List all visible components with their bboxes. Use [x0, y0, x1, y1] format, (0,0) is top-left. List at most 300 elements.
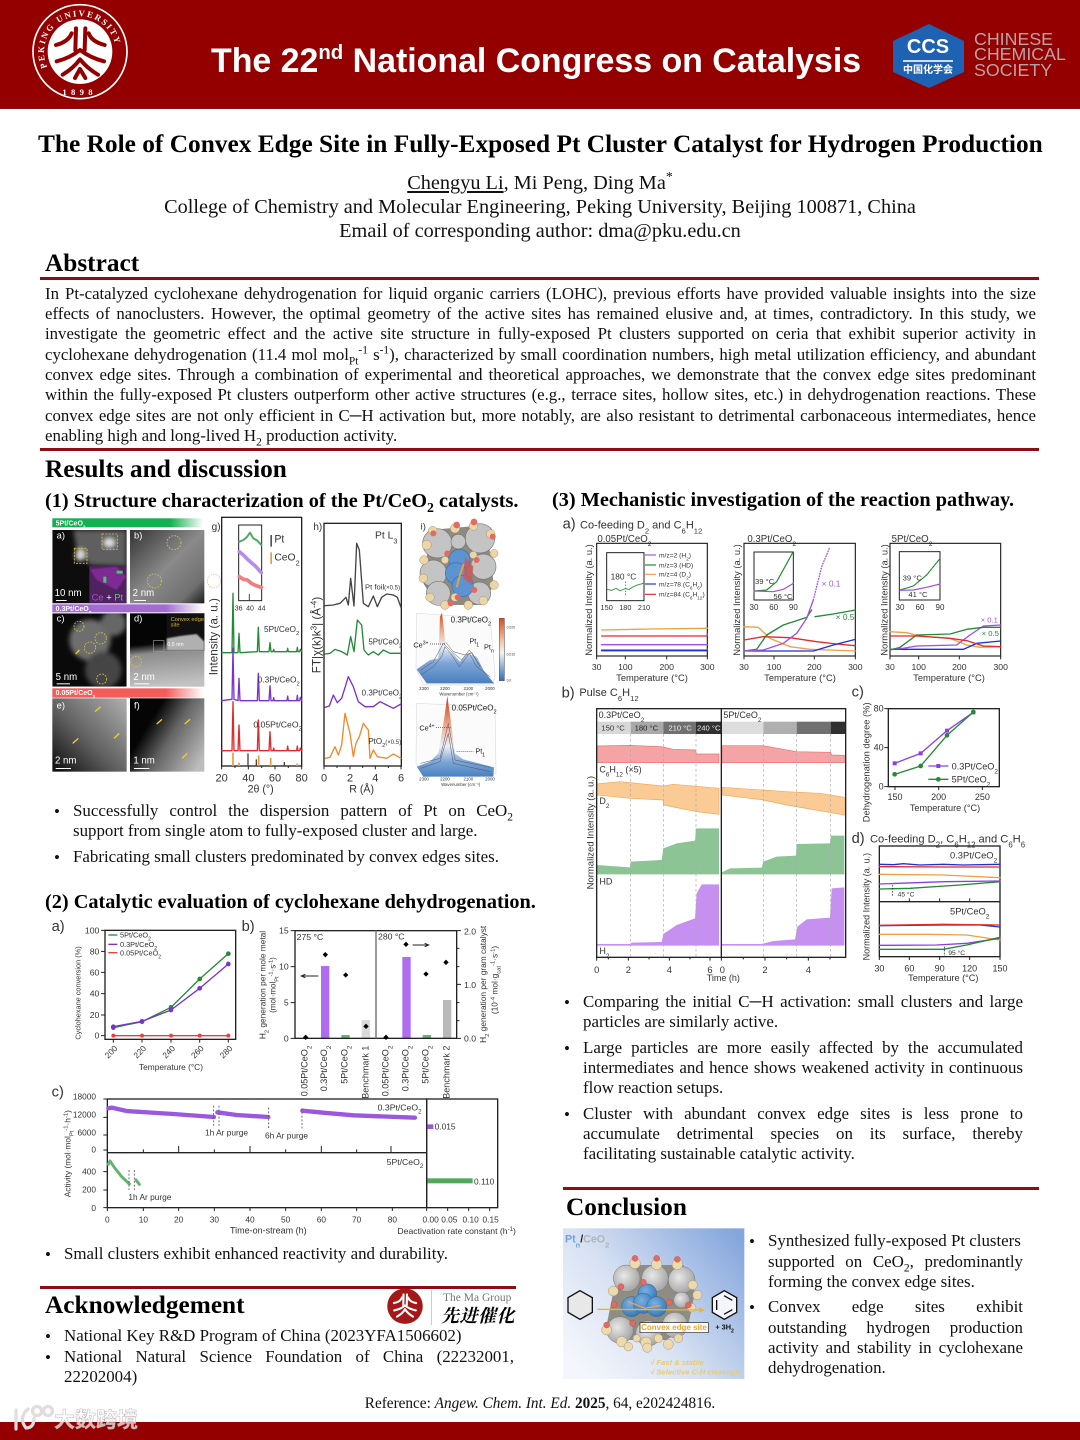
- inset: [896, 552, 945, 612]
- panel: 5Pt/CeO2: 300: [993, 662, 1008, 672]
- panel: 0.05Pt/CeO2: Normalized Intensity (a. u.): [584, 544, 594, 656]
- section 2 bullet: Small clusters exhibit enhanced reactivity and durability.: [64, 1244, 448, 1263]
- authors and affiliation: Chengyu Li, Mi Peng, Ding Ma*: [407, 169, 673, 194]
- chart b: hydrogen generation: 15: [279, 926, 289, 936]
- legend: 0.3Pt/CeO2: [952, 761, 998, 775]
- 3D spectrum j: 0.3Pt/CeO2: Wavenumber (cm⁻¹): [439, 691, 479, 696]
- panel: 0.3Pt/CeO2: 30: [739, 662, 749, 672]
- abstract text: effects of nanoclusters. However, the optimal geometry of the active sites has remained elusive and, at times, contradictory. In this study, we: [45, 304, 1036, 323]
- chart g: XRD patterns: 2θ (°): [248, 783, 274, 795]
- 3D spectrum j: 0.05Pt/CeO2: 2100: [464, 777, 474, 782]
- micrograph a: 10 nm: [55, 588, 82, 599]
- chart h: EXAFS spectra: R (Å): [349, 782, 374, 795]
- chart d: co-feeding with benzene: 120: [962, 963, 977, 973]
- chart g: XRD patterns: 40: [242, 773, 254, 785]
- 3D spectrum j: 0.3Pt/CeO2: 2100: [464, 686, 474, 691]
- chart b: hydrogen generation: 10: [279, 962, 289, 972]
- XRD inset: 44: [258, 606, 266, 613]
- watermark text: 大数跨境: [54, 1404, 138, 1434]
- heading: section 2: (2) Catalytic evaluation of cyclohexane dehydrogenation.: [45, 891, 536, 913]
- section 3 bullets: intermediates and hence shows weakened activity in continuous: [583, 1058, 1023, 1077]
- panel: 5Pt/CeO2: 5Pt/CeO2: [892, 534, 933, 548]
- chart c: stability over time: 18000: [73, 1091, 96, 1101]
- micrograph d: 2 nm: [133, 672, 155, 683]
- chart g: XRD patterns: 5Pt/CeO2: [264, 624, 299, 637]
- 3D spectrum j: 0.3Pt/CeO2: 2200: [440, 686, 450, 691]
- society name: SOCIETY: [974, 60, 1052, 80]
- inset: 90: [789, 603, 798, 612]
- chart a: conversion vs temperature: 20: [90, 1010, 100, 1020]
- chart c: dehydrogenation degree: 0: [879, 782, 884, 792]
- authors and affiliation: Email of corresponding author: dma@pku.edu.cn: [339, 220, 741, 242]
- group name: The Ma Group: [443, 1292, 511, 1304]
- chart b: pulse C6H12: 240 °C: [697, 724, 721, 733]
- chart d: co-feeding with benzene: 95 °C: [948, 949, 965, 957]
- 3D spectrum j: 0.05Pt/CeO2: 2200: [440, 777, 450, 782]
- chart c: stability over time: 0.00: [423, 1214, 439, 1224]
- chart c: dehydrogenation degree: 250: [975, 792, 990, 802]
- chart h: EXAFS spectra: 0: [321, 773, 327, 785]
- section 1 bullets: support from single atom to fully-exposed cluster and large.: [73, 821, 478, 840]
- panel: 0.3Pt/CeO2: Temperature (°C): [764, 673, 836, 683]
- benzene icon: [712, 1291, 737, 1319]
- chart b: pulse C6H12: b): [562, 685, 575, 701]
- chart c: dehydrogenation degree: 200: [931, 792, 946, 802]
- color scale bar: 0.020: [507, 625, 515, 629]
- inset: 30: [896, 603, 905, 612]
- chart c: stability over time: 70: [352, 1214, 362, 1224]
- chart c: stability over time: c): [52, 1085, 64, 1101]
- chart g: XRD patterns: 0.05Pt/CeO2: [253, 719, 303, 732]
- label bar: 5Pt/CeO2: 5Pt/CeO2: [56, 520, 86, 530]
- heading: Abstract: Abstract: [45, 249, 139, 277]
- chart c: dehydrogenation degree: 80: [874, 704, 884, 714]
- chart c: stability over time: 0.3Pt/CeO2: [378, 1102, 422, 1115]
- XRD legend: Pt: [274, 534, 284, 546]
- panel: 0.05Pt/CeO2: 30: [592, 662, 602, 672]
- chart b: hydrogen generation: H2 generation per gram catalyst: [478, 925, 491, 1043]
- support label: Ptn/CeO2: [565, 1233, 609, 1249]
- panel: 5Pt/CeO2: 200: [952, 662, 967, 672]
- chart b: hydrogen generation: 0.3Pt/CeO2: [319, 1045, 332, 1091]
- panel: 5Pt/CeO2: 100: [911, 662, 926, 672]
- legend: m/z=2 (H2): [659, 552, 691, 561]
- conclusion bullets: forming the convex edge sites.: [768, 1272, 975, 1291]
- watermark: [14, 1404, 138, 1434]
- panel: 0.05Pt/CeO2: [584, 534, 715, 683]
- chart b: hydrogen generation: 1.0: [464, 980, 476, 990]
- figure: co-feeding D2 and C6H12: Co-feeding D2 and C6H12: [580, 519, 702, 535]
- legend: [645, 552, 705, 600]
- chart c: stability over time: 0.10: [463, 1214, 479, 1224]
- chart b: pulse C6H12: D2: [599, 796, 610, 810]
- calligraphy: 先进催化: [441, 1302, 515, 1328]
- logo: red seal: [387, 1288, 423, 1324]
- chart b: hydrogen generation: (10-4 mol·gcat-1·s-1): [489, 946, 502, 1014]
- structure model i: i): [421, 521, 426, 531]
- chart d: co-feeding with benzene: 60: [904, 963, 914, 973]
- chart h: EXAFS spectra: 6: [398, 773, 404, 785]
- chart d: co-feeding with benzene: [852, 831, 1025, 983]
- inset: 180 °C: [611, 571, 636, 581]
- chart d: co-feeding with benzene: 90: [935, 963, 945, 973]
- inset: 210: [638, 603, 650, 612]
- acknowledgement list: National Natural Science Foundation of China (22232001,: [64, 1347, 514, 1366]
- logo: CCS hexagon: [893, 24, 964, 88]
- chart a: conversion vs temperature: 260: [189, 1043, 206, 1060]
- 3D spectrum j: 0.3Pt/CeO2: [413, 613, 495, 696]
- chart b: hydrogen generation: 280 °C: [378, 932, 405, 942]
- chart b: hydrogen generation: b): [242, 919, 255, 935]
- chart b: pulse C6H12: 4: [806, 965, 811, 975]
- section 3 bullets: flow reaction setups.: [583, 1078, 723, 1097]
- label bar: 0.3Pt/CeO2: 0.3Pt/CeO2: [56, 606, 92, 616]
- inset: 41 °C: [908, 590, 928, 599]
- chart c: dehydrogenation degree: 150: [887, 792, 903, 802]
- legend: m/z=4 (D2): [659, 572, 691, 580]
- micrograph b: 2 nm: [133, 588, 154, 599]
- chart b: pulse C6H12: 6: [707, 965, 713, 975]
- chart c: stability over time: 1h Ar purge: [128, 1192, 172, 1202]
- chart c: stability over time: Deactivation rate constant (h-1): [397, 1226, 516, 1236]
- conference title: The 22nd National Congress on Catalysis: [211, 42, 861, 80]
- figure: convex edge site graphic: [563, 1228, 744, 1379]
- society name: CHEMICAL: [974, 44, 1066, 64]
- 3D spectrum j: 0.05Pt/CeO2: Wavenumber (cm⁻¹): [441, 782, 481, 787]
- authors and affiliation: [164, 169, 916, 242]
- chart b: pulse C6H12: HD: [599, 876, 613, 886]
- legend: m/z=78 (C6H6): [659, 581, 702, 590]
- chart a: conversion vs temperature: [52, 919, 236, 1072]
- chart c: stability over time: 5Pt/CeO2: [387, 1157, 424, 1170]
- micrograph b: [130, 530, 204, 603]
- chart b: pulse C6H12: 4: [667, 965, 672, 975]
- text: •: [54, 848, 60, 867]
- panel: 0.3Pt/CeO2: [732, 534, 863, 683]
- XRD inset: [235, 525, 266, 613]
- section 1 bullets: Fabricating small clusters predominated by convex edges sites.: [73, 847, 499, 866]
- section 1 bullets: Successfully control the dispersion pattern of Pt on CeO2: [73, 801, 513, 823]
- panel: 0.3Pt/CeO2: 200: [807, 662, 822, 672]
- heading: Results and discussion: Results and discussion: [45, 455, 287, 483]
- text: •: [749, 1232, 755, 1251]
- 3D spectrum j: 0.05Pt/CeO2: 0.05Pt/CeO2: [452, 704, 497, 716]
- acknowledgement list: National Key R&D Program of China (2023YFA1506602): [64, 1326, 462, 1345]
- 3D spectrum j: 0.3Pt/CeO2: Ptn: [484, 642, 494, 654]
- micrograph d: 0.5 nm: [167, 642, 184, 648]
- society name: [974, 29, 1066, 80]
- section 3 bullets: [564, 992, 1023, 1163]
- callout: convex edge site: Convex edge site: [641, 1323, 707, 1332]
- inset: 39 °C: [755, 577, 775, 586]
- panel: 5Pt/CeO2: 30: [885, 662, 895, 672]
- divider: [431, 1290, 432, 1325]
- chart b: hydrogen generation: Benchmark 1: [360, 1046, 370, 1099]
- chart a: conversion vs temperature: Temperature (°C): [139, 1062, 203, 1072]
- panel: 5Pt/CeO2: [879, 534, 1008, 683]
- panel: 0.3Pt/CeO2: × 0.1: [822, 579, 841, 589]
- conclusion bullets: [749, 1231, 1023, 1377]
- legend: 0.3Pt/CeO2: [120, 940, 157, 952]
- chart h: EXAFS spectra: FT|χ(k)k3| (Å-4): [309, 597, 324, 673]
- panel: 0.3Pt/CeO2: 300: [848, 662, 863, 672]
- chart b: pulse C6H12: 210 °C: [668, 724, 692, 733]
- chart d: co-feeding with benzene: 150: [992, 963, 1008, 973]
- panel: 0.05Pt/CeO2: 0.05Pt/CeO2: [597, 534, 652, 548]
- inset: [750, 552, 798, 612]
- conclusion bullets: Synthesized fully-exposed Pt clusters: [768, 1231, 1021, 1250]
- chart c: dehydrogenation degree: Dehydrogenation degree (%): [861, 702, 871, 822]
- legend: 5Pt/CeO2: [120, 931, 151, 943]
- chart a: conversion vs temperature: 280: [218, 1043, 235, 1060]
- micrograph f: f): [134, 700, 140, 710]
- chart a: conversion vs temperature: 100: [85, 925, 100, 935]
- chart b: pulse C6H12: 0: [720, 965, 725, 975]
- structure model i: [419, 519, 498, 609]
- chart b: hydrogen generation: 0.3Pt/CeO2: [401, 1045, 414, 1091]
- chart d: co-feeding with benzene: 45 °C: [898, 891, 915, 899]
- text: •: [45, 1327, 51, 1346]
- micrograph a: a): [57, 530, 65, 540]
- inset: [601, 553, 650, 612]
- chart b: hydrogen generation: Benchmark 2: [441, 1046, 451, 1099]
- panel: 0.3Pt/CeO2: 100: [767, 662, 781, 672]
- chart b: pulse C6H12: 5Pt/CeO2: [723, 710, 762, 724]
- inset: 60: [916, 603, 925, 612]
- chart b: hydrogen generation: [242, 919, 502, 1099]
- chart b: hydrogen generation: (mol·molPt-1·s-1): [269, 957, 281, 1013]
- chart a: conversion vs temperature: 0: [95, 1031, 100, 1041]
- XRD inset: 36: [235, 606, 243, 613]
- benefits: √ Selective C-H cleavage: [650, 1367, 740, 1376]
- chart c: stability over time: 40: [245, 1214, 255, 1224]
- text: •: [564, 1039, 570, 1058]
- abstract text: [45, 284, 1036, 448]
- chart h: EXAFS spectra: PtO2(×0.5): [368, 737, 401, 749]
- chart h: EXAFS spectra: 2: [347, 773, 353, 785]
- chart g: XRD patterns: 20: [216, 773, 228, 785]
- chart c: stability over time: 80: [388, 1214, 397, 1224]
- micrograph a: Ce + Pt: [92, 593, 123, 603]
- chart c: stability over time: 20: [174, 1214, 184, 1224]
- panel: 5Pt/CeO2: Temperature (°C): [913, 673, 985, 683]
- micrograph c: c): [57, 614, 64, 624]
- chart b: pulse C6H12: 2: [762, 965, 768, 975]
- legend: m/z=3 (HD): [659, 562, 693, 569]
- conclusion bullets: outstanding hydrogen production: [768, 1318, 1023, 1337]
- section 3 bullets: facilitating sustainable catalytic activity.: [583, 1144, 855, 1163]
- chart c: stability over time: 0: [91, 1145, 96, 1155]
- color scale bar: 0.010: [507, 652, 515, 656]
- chart c: dehydrogenation degree: 40: [874, 743, 884, 753]
- chart c: stability over time: 12000: [73, 1110, 96, 1120]
- panel: 0.05Pt/CeO2: 300: [700, 662, 715, 672]
- micrograph e: e): [57, 700, 65, 710]
- chart c: stability over time: 30: [210, 1214, 219, 1224]
- section 3 bullets: particles are similarly active.: [583, 1012, 778, 1031]
- header band: [0, 0, 1080, 109]
- chart c: stability over time: 0.15: [483, 1214, 499, 1224]
- heading: section 3: (3) Mechanistic investigation of the reaction pathway.: [552, 489, 1014, 511]
- chart c: stability over time: 0.05: [441, 1214, 458, 1224]
- panel: 0.05Pt/CeO2: 200: [659, 662, 674, 672]
- panel: 0.3Pt/CeO2: × 0.5: [836, 612, 855, 622]
- poster title: The Role of Convex Edge Site in Fully-Exposed Pt Cluster Catalyst for Hydrogen Production: [38, 130, 1043, 158]
- 3D spectrum j: 0.05Pt/CeO2: Pt1: [475, 746, 485, 758]
- chart b: pulse C6H12: Pulse C6H12: [579, 687, 639, 702]
- chart c: stability over time: 200: [82, 1185, 96, 1195]
- chart b: pulse C6H12: 150 °C: [601, 724, 625, 733]
- chart c: stability over time: 6000: [77, 1127, 96, 1137]
- abstract text: In Pt-catalyzed cyclohexane dehydrogenation for liquid organic carriers (LOHC), previous efforts have provided valuable insights into the size: [45, 284, 1036, 303]
- chart b: hydrogen generation: 2.0: [464, 926, 476, 936]
- logo: Peking University seal: 1898: [62, 87, 97, 97]
- chart b: pulse C6H12: Normalized Intensity (a. u.): [585, 776, 596, 889]
- legend: [928, 761, 998, 788]
- micrograph d: site: [171, 623, 179, 629]
- chart a: conversion vs temperature: Cyclohexane conversion (%): [74, 946, 83, 1040]
- chart g: XRD patterns: 0.3Pt/CeO2: [258, 674, 300, 687]
- logo: CCS hexagon: CCS: [907, 36, 949, 58]
- acknowledgement list: 22202004): [64, 1367, 137, 1386]
- figure: structure characterization: [52, 516, 515, 795]
- figure: co-feeding D2 and C6H12: [563, 516, 1008, 683]
- chart d: co-feeding with benzene: Normalized Intensity (a. u.): [861, 853, 871, 960]
- reference line: Reference: Angew. Chem. Int. Ed. 2025, 64, e202424816.: [365, 1395, 715, 1412]
- group logo and signature: [387, 1288, 516, 1328]
- 3D spectrum j: 0.3Pt/CeO2: Pt1: [469, 636, 479, 648]
- micrograph b: b): [134, 530, 142, 540]
- chart g: XRD patterns: Intensity (a. u.): [207, 598, 220, 675]
- chart h: EXAFS spectra: 4: [372, 773, 378, 785]
- acknowledgement list: [45, 1326, 514, 1386]
- chart a: conversion vs temperature: 200: [103, 1043, 120, 1060]
- chart b: hydrogen generation: 5Pt/CeO2: [339, 1045, 353, 1084]
- chart g: XRD patterns: g): [212, 522, 221, 533]
- chart g: XRD patterns: [207, 517, 308, 795]
- abstract text: convex edge sites. Through a combination of experimental and theoretical approaches, we demonstrate that the convex edge sites predominant: [45, 365, 1036, 384]
- society name: CHINESE: [974, 29, 1053, 49]
- inset: 90: [936, 603, 945, 612]
- footer band: [0, 1422, 1080, 1440]
- text: •: [45, 1348, 51, 1367]
- benefits: [650, 1358, 740, 1376]
- chart g: XRD patterns: 80: [296, 773, 308, 785]
- chart a: conversion vs temperature: 80: [90, 946, 100, 956]
- abstract text: convex edge sites are not only efficient in C─H activation but, more notably, are also resistant to detrimental carbonaceous intermediates, hence: [45, 406, 1036, 425]
- micrograph c: 5 nm: [56, 672, 77, 683]
- chart b: hydrogen generation: 5: [284, 998, 289, 1008]
- label bar: 5Pt/CeO2: [52, 518, 203, 530]
- 3D spectrum j: 0.05Pt/CeO2: [416, 696, 497, 787]
- chart c: stability over time: Time-on-stream (h): [230, 1225, 307, 1235]
- micrograph f: 1 nm: [133, 755, 155, 766]
- abstract text: within the fully-exposed Pt clusters outperform other active structures (e.g., terrace sites, hollow sites, etc.) in dehydrogenation reactions. These: [45, 385, 1036, 404]
- micrograph d: Convex edge: [171, 617, 204, 623]
- micrograph f: [130, 698, 204, 772]
- chart c: stability over time: 50: [281, 1214, 291, 1224]
- panel: 0.3Pt/CeO2: 0.3Pt/CeO2: [747, 534, 796, 548]
- text: •: [564, 1105, 570, 1124]
- micrograph d: d): [134, 614, 142, 624]
- logo: CCS hexagon: 中国化学会: [903, 63, 953, 76]
- chart b: hydrogen generation: 0: [284, 1033, 289, 1043]
- chart c: stability over time: 1h Ar purge: [205, 1128, 248, 1138]
- cyclohexane icon: [568, 1291, 592, 1319]
- label bar: 0.05Pt/CeO2: [52, 688, 203, 700]
- chart a: conversion vs temperature: 60: [90, 967, 100, 977]
- chart b: pulse C6H12: 0: [594, 965, 599, 975]
- chart c: dehydrogenation degree: Temperature (°C): [910, 803, 980, 813]
- 3D spectrum j: 0.3Pt/CeO2: 2300: [419, 686, 429, 691]
- chart h: EXAFS spectra: Pt L3: [375, 530, 397, 545]
- chart c: stability over time: 0.015: [435, 1122, 456, 1132]
- chart c: dehydrogenation degree: [852, 684, 999, 822]
- section 1 bullets: [54, 801, 513, 867]
- chart d: co-feeding with benzene: d): [852, 831, 865, 847]
- chart c: stability over time: 0: [105, 1214, 110, 1224]
- chart c: stability over time: 10: [139, 1214, 148, 1224]
- cluster model: [602, 1255, 702, 1352]
- conclusion bullets: supported on CeO2, predominantly: [768, 1252, 1023, 1274]
- heading: Acknowledgement: Acknowledgement: [45, 1291, 245, 1319]
- chart b: pulse C6H12: [562, 685, 846, 983]
- chart g: XRD patterns: 60: [269, 773, 281, 785]
- chart b: pulse C6H12: 0.3Pt/CeO2: [599, 710, 645, 724]
- 3D spectrum j: 0.3Pt/CeO2: j): [421, 613, 427, 623]
- section 3 bullets: Comparing the initial C─H activation: small clusters and large: [583, 992, 1023, 1011]
- 3D spectrum j: 0.3Pt/CeO2: 0.3Pt/CeO2: [451, 616, 491, 628]
- logo: Peking University seal: PEKING UNIVERSITY: [38, 10, 120, 70]
- chart c: stability over time: 0: [91, 1203, 96, 1213]
- section 3 bullets: Cluster with abundant convex edge sites is less prone to: [583, 1104, 1023, 1123]
- inset: 150: [601, 603, 613, 612]
- micrograph d: [130, 613, 204, 687]
- chart h: EXAFS spectra: Pt foil(×0.5): [365, 582, 400, 591]
- panel: 0.05Pt/CeO2: Temperature (°C): [616, 673, 688, 683]
- chart b: hydrogen generation: 5Pt/CeO2: [421, 1045, 434, 1084]
- XRD legend: CeO2: [274, 553, 300, 567]
- chart b: pulse C6H12: Time (h): [707, 973, 740, 983]
- chart b: hydrogen generation: 275 °C: [297, 932, 323, 942]
- legend: m/z=84 (C6H12): [659, 592, 705, 600]
- chart b: pulse C6H12: H2: [599, 946, 610, 960]
- inset: 56 °C: [773, 592, 793, 601]
- text: •: [749, 1298, 755, 1317]
- micrograph c: [52, 611, 127, 688]
- panel: 5Pt/CeO2: × 0.1: [981, 616, 998, 625]
- chart a: conversion vs temperature: a): [52, 919, 65, 935]
- watermark emblem: [14, 1405, 54, 1431]
- figure: catalytic evaluation: [52, 919, 516, 1236]
- logo: Peking University seal: [32, 4, 128, 100]
- figure: pulse and co-feeding experiments: [562, 684, 1025, 983]
- 3D spectrum j: 0.05Pt/CeO2: 2300: [419, 777, 429, 782]
- micrograph e: [52, 698, 127, 772]
- label bar: 0.3Pt/CeO2: [52, 604, 203, 616]
- chart h: EXAFS spectra: 5Pt/CeO2: [368, 637, 402, 649]
- section 3 bullets: accumulate detrimental species on its surface, thereby: [583, 1124, 1023, 1143]
- chart a: conversion vs temperature: 240: [160, 1043, 177, 1060]
- chart c: stability over time: 0.110: [474, 1177, 495, 1187]
- color scale bar: [499, 618, 515, 683]
- chart d: co-feeding with benzene: Co-feeding D2, C6H12 and C6H6: [870, 833, 1025, 849]
- panel: 5Pt/CeO2: Normalized Intensity (a. u.): [879, 544, 889, 656]
- product label: + 3H2: [715, 1323, 734, 1335]
- heading: Conclusion: Conclusion: [566, 1193, 687, 1221]
- chart c: dehydrogenation degree: c): [852, 684, 864, 700]
- text: •: [45, 1245, 51, 1264]
